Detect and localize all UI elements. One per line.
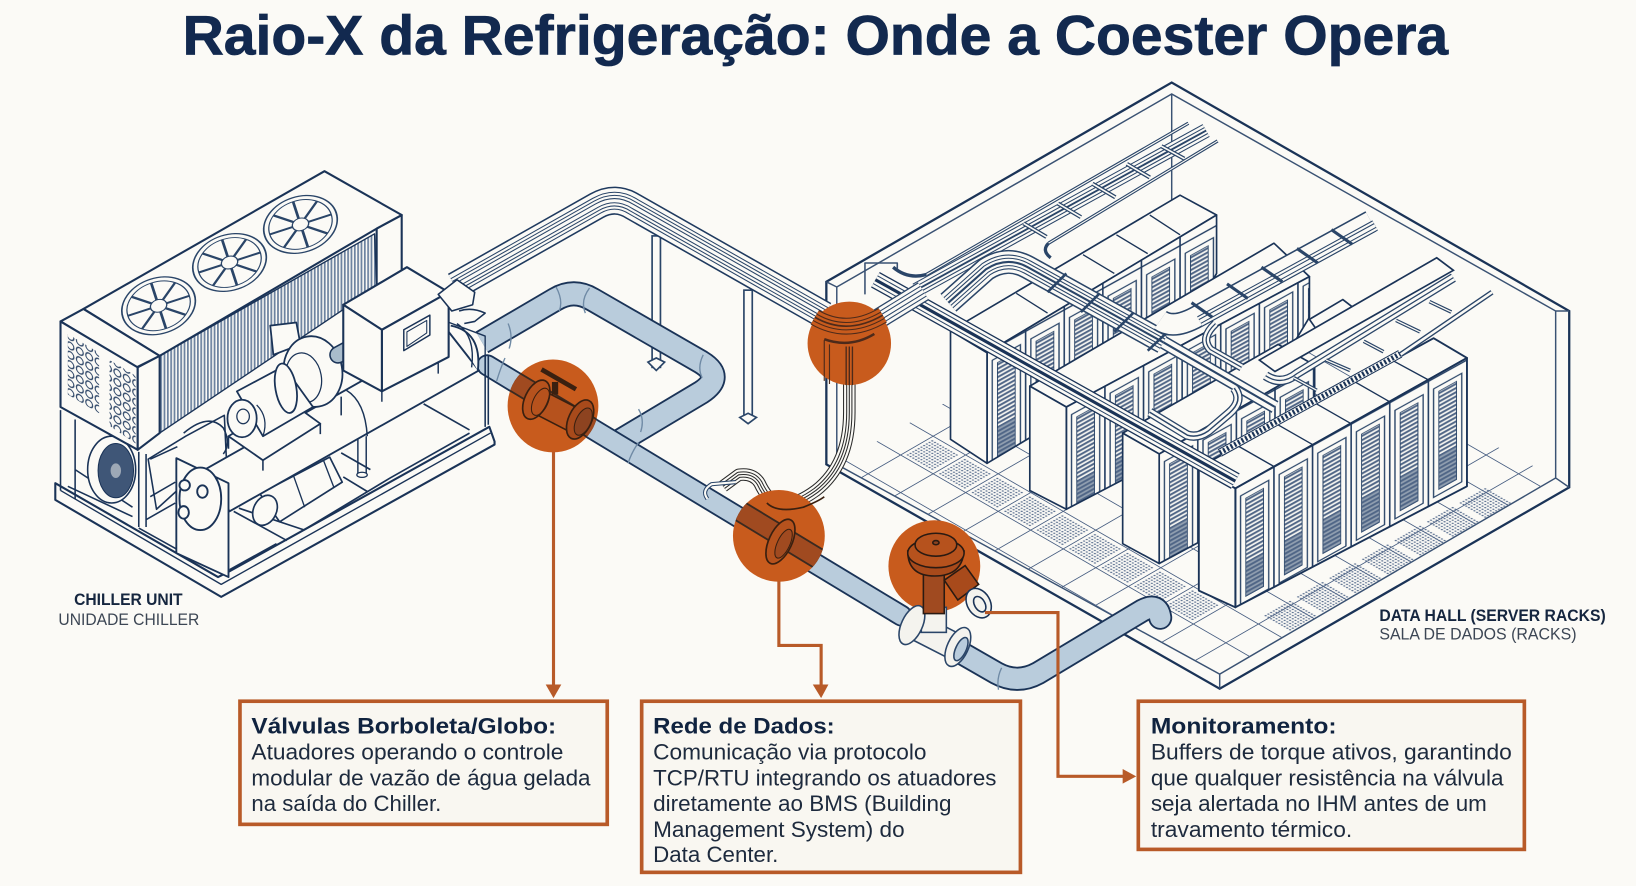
chiller unit <box>55 171 495 597</box>
callout: monitoring: travamento térmico. <box>1151 817 1352 842</box>
callout: valves: Atuadores operando o controle <box>251 740 563 765</box>
network cables to pipe <box>705 346 849 505</box>
cabling detail inside highlight <box>815 315 883 385</box>
arrow: valve to callout <box>546 452 561 698</box>
callout: data network <box>642 701 1020 872</box>
butterfly valve <box>510 367 597 440</box>
arrow: actuator to monitoring callout <box>985 613 1136 784</box>
back ladder tray with cable bundle <box>893 123 1218 290</box>
callout: valves: modular de vazão de água gelada <box>251 766 591 791</box>
title: Raio-X da Refrigeração: Onde a Coester Opera <box>183 4 1449 66</box>
condenser end plate <box>176 458 228 577</box>
floor tiles <box>837 273 1556 674</box>
orange highlight: butterfly valve <box>508 360 598 452</box>
label: chiller unit: CHILLER UNIT <box>74 591 183 609</box>
callout: valves: Válvulas Borboleta/Globo: <box>251 714 556 739</box>
callout: data network: TCP/RTU integrando os atuadores <box>653 766 996 791</box>
skid frame <box>55 355 495 597</box>
globe valve with actuator <box>894 533 996 670</box>
server rack row D <box>951 195 1217 463</box>
callout: data network: diretamente ao BMS (Building <box>653 791 952 816</box>
callout: monitoring <box>1138 701 1524 849</box>
ladder tray right <box>1220 278 1492 453</box>
fan 2 <box>185 224 274 301</box>
callout: monitoring: Monitoramento: <box>1151 714 1337 739</box>
fan 1 <box>114 268 203 344</box>
shell and tube vessel <box>207 321 485 511</box>
branch tray upper right <box>1160 221 1375 367</box>
orange highlight: flange <box>733 490 825 582</box>
control panel <box>343 267 449 402</box>
callout: data network: Management System) do <box>653 817 905 842</box>
orange highlight: cabling <box>808 302 891 385</box>
flange on pipe <box>736 496 825 568</box>
coil hole panels <box>68 334 136 444</box>
data hall room <box>826 83 1569 689</box>
server rack row C <box>1030 243 1309 509</box>
arrow: flange to data callout <box>779 581 828 698</box>
callout: data network: Comunicação via protocolo <box>653 740 927 765</box>
server rack row A <box>1199 338 1467 607</box>
callout: monitoring: que qualquer resistência na válvula <box>1151 766 1504 791</box>
callout: valves <box>240 701 607 824</box>
label: chiller unit <box>58 591 199 629</box>
label: chiller unit: UNIDADE CHILLER <box>58 611 199 629</box>
cable connector <box>438 280 485 324</box>
perforated floor tiles <box>899 436 1518 634</box>
main chilled water pipe <box>487 358 1160 690</box>
rear compressor and pipes <box>148 415 227 509</box>
callout: valves: na saída do Chiller. <box>251 791 441 816</box>
label: data hall <box>1379 607 1606 644</box>
valve body <box>894 602 976 670</box>
orange highlight: actuator <box>888 520 980 612</box>
curved diagonal tray <box>948 262 1275 407</box>
upper condenser housing <box>61 171 402 450</box>
callout: monitoring: Buffers de torque ativos, garantindo <box>1151 740 1512 765</box>
small loop tray <box>1150 388 1238 436</box>
fan 3 <box>256 186 345 262</box>
motor and compressor <box>227 322 361 471</box>
label: data hall: SALA DE DADOS (RACKS) <box>1379 626 1577 644</box>
secondary tank <box>248 457 342 529</box>
hall cable trays <box>865 123 1492 481</box>
label: data hall: DATA HALL (SERVER RACKS) <box>1379 607 1606 625</box>
main long tray <box>865 263 1235 481</box>
cable tray chiller to hall <box>455 201 923 336</box>
callout: data network: Data Center. <box>653 842 778 867</box>
callout: data network: Rede de Dados: <box>653 714 835 739</box>
room shell <box>826 83 1569 689</box>
overhead white duct <box>1259 258 1453 372</box>
pipe supports <box>648 236 756 424</box>
server rack row B <box>1123 300 1352 564</box>
lower fan <box>88 436 136 503</box>
chilled water return loop <box>482 287 713 440</box>
callout: monitoring: seja alertada no IHM antes de um <box>1151 791 1487 816</box>
